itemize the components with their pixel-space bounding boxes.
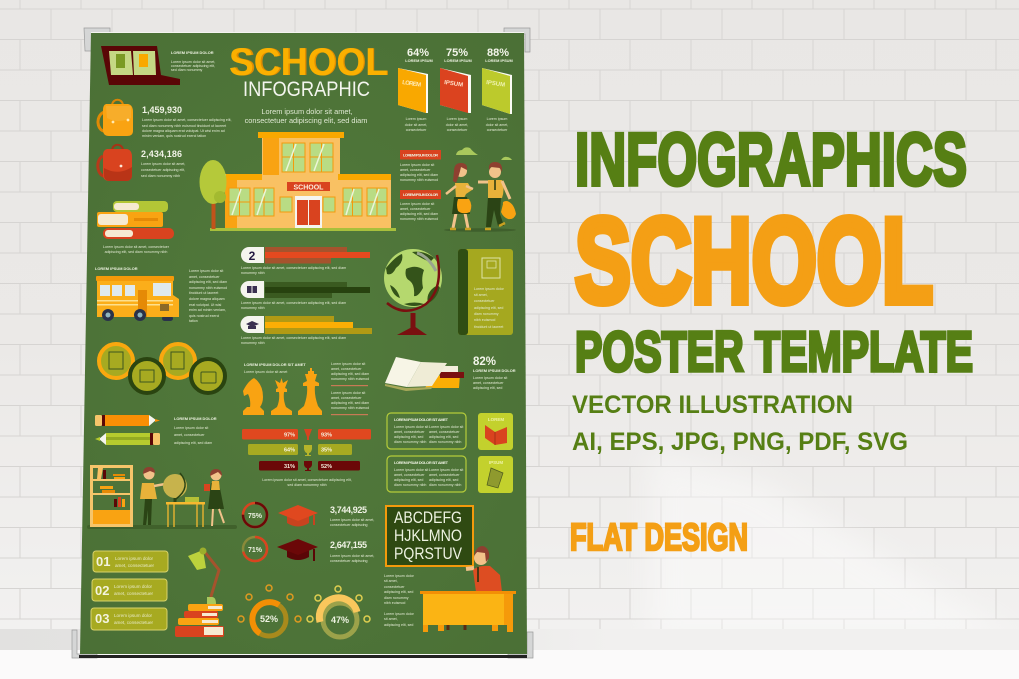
tile: lorem red book: LOREM xyxy=(488,417,504,422)
laptop caption: sed diam nonummy xyxy=(171,68,203,72)
red label text blocks: adipiscing elit, sed diam xyxy=(400,173,438,177)
percent: 75% ipsum book: IPSUM xyxy=(444,80,463,89)
bus description: nonummy nibh euismod xyxy=(189,286,227,290)
icon: chess pieces xyxy=(243,368,322,415)
panel: notebook info card: diam nonummy xyxy=(474,312,499,316)
chess heading xyxy=(244,362,306,374)
chess description: Lorem ipsum dolor sit xyxy=(331,362,365,366)
blackboard description: Lorem ipsum dolor xyxy=(384,612,415,616)
panel: text box one: adipiscing elit, sed xyxy=(394,435,423,439)
tile: ipsum green book: IPSUM xyxy=(489,460,503,465)
chart: 75% ring xyxy=(243,503,267,527)
pencils caption: Lorem ipsum dolor sit xyxy=(174,426,208,430)
red label text blocks: nonummy nibh euismod xyxy=(400,178,438,182)
panel: text box one: amet, consectetuer xyxy=(429,430,460,434)
tile: lorem red book xyxy=(478,413,513,450)
chart: 47% donut xyxy=(307,586,370,637)
chart: 71% ring xyxy=(243,537,267,561)
blackboard description: sit amet, xyxy=(384,617,398,621)
blackboard description xyxy=(384,574,415,627)
chart: paired percentage bars with trophies: 97% xyxy=(284,432,295,438)
percent: 88% ipsum book: dolor sit amet, xyxy=(486,123,508,127)
chart: paired percentage bars with trophies: 31% xyxy=(284,464,295,470)
percent: 64% lorem book: consectetuer xyxy=(406,128,427,132)
stat: 3,744,925: Lorem ipsum dolor sit amet, xyxy=(330,518,374,522)
stat: 2,434,186: Lorem ipsum dolor sit amet, xyxy=(141,162,185,166)
chess description: amet, consectetuer xyxy=(331,396,362,400)
books caption: Lorem ipsum dolor sit amet, consectetuer xyxy=(103,245,170,249)
chart: 47% donut: 47% xyxy=(331,615,349,625)
illustration: school building xyxy=(210,132,396,231)
percent: 64% lorem book: LOREM IPSUM xyxy=(405,58,433,63)
chart: paired percentage bars with trophies: 35% xyxy=(321,448,332,454)
list: numbered items xyxy=(91,551,168,630)
red label text blocks: amet, consectetuer xyxy=(400,207,431,211)
illustration: students xyxy=(444,162,516,232)
illustration: teacher at desk xyxy=(420,546,516,632)
blackboard description: nibh euismod xyxy=(384,601,405,605)
illustration: blackboard: ABCDEFG xyxy=(394,508,462,527)
bars caption: Lorem ipsum dolor sit amet, consectetuer adipiscing elit, xyxy=(262,478,352,482)
icon: globe xyxy=(384,249,442,335)
red label text blocks: nonummy nibh euismod xyxy=(400,217,438,221)
icon: open book xyxy=(385,357,464,391)
blackboard description: diam nonummy xyxy=(384,596,409,600)
title: INFOGRAPHIC xyxy=(243,78,370,101)
subheading: vector illustration: VECTOR ILLUSTRATION xyxy=(572,391,853,419)
bus description: erat volutpat. Ut wisi xyxy=(189,303,222,307)
poster brackets xyxy=(72,28,533,658)
percent: 64% lorem book: Lorem ipsum xyxy=(406,117,426,121)
chart: 52% donut: 52% xyxy=(260,614,278,624)
chess description: amet, consectetuer xyxy=(331,367,362,371)
icon: tree xyxy=(200,160,226,229)
blackboard description: adipiscing elit, sed xyxy=(384,623,413,627)
stat: 1,459,930: 1,459,930 xyxy=(142,105,182,115)
chart: bar one with knight pill: Lorem ipsum dolor sit amet, consectetuer adipiscing elit, sed diam xyxy=(241,266,346,270)
percent: 75% ipsum book xyxy=(440,47,472,132)
bus description: Lorem ipsum dolor sit xyxy=(189,269,223,273)
panel: text box one: diam nonummy nibh xyxy=(394,440,426,444)
list: numbered items: amet, consectetuer xyxy=(115,563,155,568)
chart: bar two with book pill: nonummy nibh xyxy=(241,306,265,310)
percent: 75% ipsum book: dolor sit amet, xyxy=(446,123,468,127)
red label text blocks: Lorem ipsum dolor sit xyxy=(400,163,434,167)
chess heading: Lorem ipsum dolor sit amet xyxy=(244,370,287,374)
panel: text box one: amet, consectetuer xyxy=(394,430,425,434)
icons: four overlapping circles xyxy=(99,344,225,393)
stat: 82%: LOREM IPSUM DOLOR xyxy=(473,368,516,373)
bus description xyxy=(189,269,227,323)
books caption xyxy=(103,245,170,254)
icon: pencils xyxy=(95,415,160,445)
stat: 2,647,155: consectetuer adipiscing xyxy=(330,559,368,563)
chart: bar two with book pill: Lorem ipsum dolor sit amet, consectetuer adipiscing elit, sed diam xyxy=(241,301,346,305)
panel: text box two: adipiscing elit, sed xyxy=(429,478,458,482)
panel: text box two: LOREM IPSUM DOLOR SIT AMET xyxy=(394,460,449,465)
laptop caption: LOREM IPSUM DOLOR xyxy=(171,50,214,55)
list: numbered items: 03 xyxy=(95,611,109,626)
panel: text box two: diam nonummy nibh xyxy=(429,483,461,487)
icon: red backpack xyxy=(98,145,132,181)
blackboard description: adipiscing elit, sed xyxy=(384,590,413,594)
panel: text box two: amet, consectetuer xyxy=(394,473,425,477)
chart: bar one with knight pill: 2 xyxy=(249,249,256,263)
stat: 2,434,186: consectetuer adipiscing elit, xyxy=(141,168,185,172)
percent: 75% ipsum book: LOREM IPSUM xyxy=(444,58,472,63)
list: numbered items: Lorem ipsum dolor xyxy=(115,556,154,561)
percent: 75% ipsum book: consectetuer xyxy=(447,128,468,132)
pencils caption xyxy=(174,416,217,445)
icon: dark graduation cap xyxy=(277,539,318,561)
label: flat design: FLAT DESIGN xyxy=(570,517,748,559)
icon: orange backpack xyxy=(98,100,133,136)
title: SCHOOL xyxy=(229,41,388,84)
poster board xyxy=(79,32,527,658)
bars caption: sed diam nonummy nibh xyxy=(287,483,327,487)
red label text blocks: LOREM IPSUM DOLOR xyxy=(403,152,438,158)
title xyxy=(229,41,389,101)
percent: 88% ipsum book: consectetuer xyxy=(487,128,508,132)
books caption: adipiscing elit, sed diam nonummy nibh xyxy=(105,250,167,254)
chart: 75% ring: 75% xyxy=(248,513,263,520)
stat: 82% xyxy=(473,356,516,390)
chart: paired percentage bars with trophies: 64% xyxy=(284,448,295,454)
chart: paired percentage bars with trophies: 52% xyxy=(321,464,332,470)
panel: text box one xyxy=(387,413,466,449)
subheading: file formats: AI, EPS, JPG, PNG, PDF, SVG xyxy=(572,428,908,456)
subtitle: consectetuer adipiscing elit, sed diam xyxy=(245,116,367,125)
percent: 88% ipsum book xyxy=(482,47,513,132)
chess description: Lorem ipsum dolor sit xyxy=(331,391,365,395)
red label text blocks: LOREM IPSUM DOLOR xyxy=(403,192,438,197)
panel: notebook info card: sit amet, xyxy=(474,293,488,297)
panel: notebook info card: Lorem ipsum dolor xyxy=(474,287,505,291)
chart: bar three with cap pill: Lorem ipsum dolor sit amet, consectetuer adipiscing elit, sed diam xyxy=(241,336,346,340)
stat: 2,434,186 xyxy=(141,149,185,178)
stat: 1,459,930 xyxy=(142,105,232,138)
chart: paired percentage bars with trophies xyxy=(242,429,371,471)
stat: 1,459,930: sed diam nonummy nibh euismod tincidunt ut laoreet xyxy=(142,124,226,128)
stat: 1,459,930: dolore magna aliquam erat volutpat. Ut wisi enim ad xyxy=(142,129,225,133)
list: numbered items: 01 xyxy=(96,554,110,569)
chart: bar three with cap pill: nonummy nibh xyxy=(241,341,265,345)
list: numbered items: 02 xyxy=(95,583,109,598)
panel: text box two: diam nonummy nibh xyxy=(394,483,426,487)
percent: 88% ipsum book: LOREM IPSUM xyxy=(485,58,513,63)
clouds xyxy=(456,147,512,160)
chess description: adipiscing elit, sed diam xyxy=(331,372,369,376)
red label text blocks xyxy=(400,150,441,221)
bars caption xyxy=(262,478,352,487)
list: numbered items: Lorem ipsum dolor xyxy=(114,613,153,618)
title: SCHOOL xyxy=(231,41,389,84)
pencils caption: adipiscing elit, sed diam xyxy=(174,441,212,445)
stat: 82%: Lorem ipsum dolor sit xyxy=(473,376,507,380)
panel: notebook info card: tincidunt ut laoreet xyxy=(474,325,503,329)
bus description: adipiscing elit, sed diam xyxy=(189,280,227,284)
panel: text box two: Lorem ipsum dolor sit xyxy=(429,468,463,472)
panel: notebook info card xyxy=(458,249,513,335)
subtitle: Lorem ipsum dolor sit amet, xyxy=(261,107,353,116)
blackboard description: consectetuer xyxy=(384,585,405,589)
bus description: quis nostrud exerci xyxy=(189,314,219,318)
percent: 88% ipsum book: 88% xyxy=(487,47,509,59)
list: numbered items: amet, consectetuer xyxy=(114,591,154,596)
stat: 3,744,925: consectetuer adipiscing xyxy=(330,523,368,527)
chart: bar three with cap pill xyxy=(240,316,372,345)
chart: paired percentage bars with trophies: 93% xyxy=(321,432,332,438)
stat: 1,459,930: minim veniam, quis nostrud exerci tation xyxy=(142,134,206,138)
percent: 88% ipsum book: Lorem ipsum xyxy=(487,117,507,121)
panel: text box one: Lorem ipsum dolor sit xyxy=(394,425,428,429)
illustration: blackboard xyxy=(386,506,473,566)
blackboard description: sit amet, xyxy=(384,579,398,583)
red label text blocks: adipiscing elit, sed diam xyxy=(400,212,438,216)
illustration: blackboard: HJKLMNO xyxy=(394,526,462,545)
panel: text box two xyxy=(387,456,466,492)
pencils caption: amet, consectetuer xyxy=(174,433,205,437)
chart: bar one with knight pill xyxy=(241,247,370,275)
bus description: dolore magna aliquam xyxy=(189,297,225,301)
tile: ipsum green book xyxy=(478,456,513,493)
percent: 64% lorem book: 64% xyxy=(407,47,429,59)
list: numbered items: Lorem ipsum dolor xyxy=(114,584,153,589)
laptop caption: consectetuer adipiscing elit, xyxy=(171,64,215,68)
illustration: school building: SCHOOL xyxy=(294,184,324,192)
stat: 2,647,155 xyxy=(330,540,374,563)
panel: text box one: diam nonummy nibh xyxy=(429,440,461,444)
icon: laptop with books xyxy=(101,46,180,85)
stat: 1,459,930: Lorem ipsum dolor sit amet, consectetuer adipiscing elit, xyxy=(142,118,232,122)
bus description: tation xyxy=(189,319,198,323)
bus description: amet, consectetuer xyxy=(189,275,220,279)
chess description: nonummy nibh euismod xyxy=(331,406,369,410)
bus heading: LOREM IPSUM DOLOR xyxy=(95,266,138,271)
chess description: nonummy nibh euismod xyxy=(331,377,369,381)
panel: notebook info card: consectetuer xyxy=(474,299,495,303)
red label text blocks: Lorem ipsum dolor sit xyxy=(400,202,434,206)
panel: text box two: Lorem ipsum dolor sit xyxy=(394,468,428,472)
panel: text box two: amet, consectetuer xyxy=(429,473,460,477)
percent: 75% ipsum book: Lorem ipsum xyxy=(447,117,467,121)
stat: 2,434,186: sed diam nonummy nibh xyxy=(141,174,180,178)
blackboard description: Lorem ipsum dolor xyxy=(384,574,415,578)
percent: 64% lorem book xyxy=(398,47,433,132)
chess description xyxy=(331,362,369,415)
stat: 82%: amet, consectetuer xyxy=(473,381,504,385)
illustration: blackboard: PQRSTUV xyxy=(394,544,463,563)
pencils caption: LOREM IPSUM DOLOR xyxy=(174,416,217,421)
stat: 3,744,925 xyxy=(330,505,374,527)
laptop caption: Lorem ipsum dolor sit amet, xyxy=(171,60,215,64)
stat: 2,647,155: Lorem ipsum dolor sit amet, xyxy=(330,554,374,558)
percent: 64% lorem book: dolor sit amet, xyxy=(405,123,427,127)
panel: text box one: Lorem ipsum dolor sit xyxy=(429,425,463,429)
stat: 3,744,925: 3,744,925 xyxy=(330,505,367,515)
icon: orange graduation cap xyxy=(278,505,318,526)
bus description: tincidunt ut laoreet xyxy=(189,291,218,295)
chess description: adipiscing elit, sed diam xyxy=(331,401,369,405)
chart: bar one with knight pill: nonummy nibh xyxy=(241,271,265,275)
panel: text box one: LOREM IPSUM DOLOR SIT AMET xyxy=(394,417,449,422)
icon: school bus xyxy=(96,276,179,321)
panel: text box one: adipiscing elit, sed xyxy=(429,435,458,439)
percent: 88% ipsum book: IPSUM xyxy=(486,80,505,89)
subtitle xyxy=(245,107,367,125)
panel: notebook info card: nibh euismod xyxy=(474,318,495,322)
laptop caption xyxy=(171,50,215,72)
stat: 2,434,186: 2,434,186 xyxy=(141,149,182,159)
icon: stack of books xyxy=(97,201,174,239)
chess heading: LOREM IPSUM DOLOR SIT AMET xyxy=(244,362,306,367)
stat: 82%: 82% xyxy=(473,356,496,368)
illustration: classroom with globe xyxy=(87,465,237,529)
chart: bar two with book pill xyxy=(240,281,370,310)
panel: notebook info card: adipiscing elit, sed xyxy=(474,306,503,310)
chart: 52% donut xyxy=(238,585,301,636)
percent: 75% ipsum book: 75% xyxy=(446,47,468,59)
stat: 82%: adipiscing elit, sed xyxy=(473,386,502,390)
red label text blocks: amet, consectetuer xyxy=(400,168,431,172)
chart: 71% ring: 71% xyxy=(248,547,263,554)
stat: 2,647,155: 2,647,155 xyxy=(330,540,367,550)
percent: 64% lorem book: LOREM xyxy=(402,80,421,89)
icon: desk lamp on books xyxy=(175,548,224,637)
panel: text box two: adipiscing elit, sed xyxy=(394,478,423,482)
bus description: enim ad minim veniam, xyxy=(189,308,226,312)
list: numbered items: amet, consectetuer xyxy=(114,620,154,625)
